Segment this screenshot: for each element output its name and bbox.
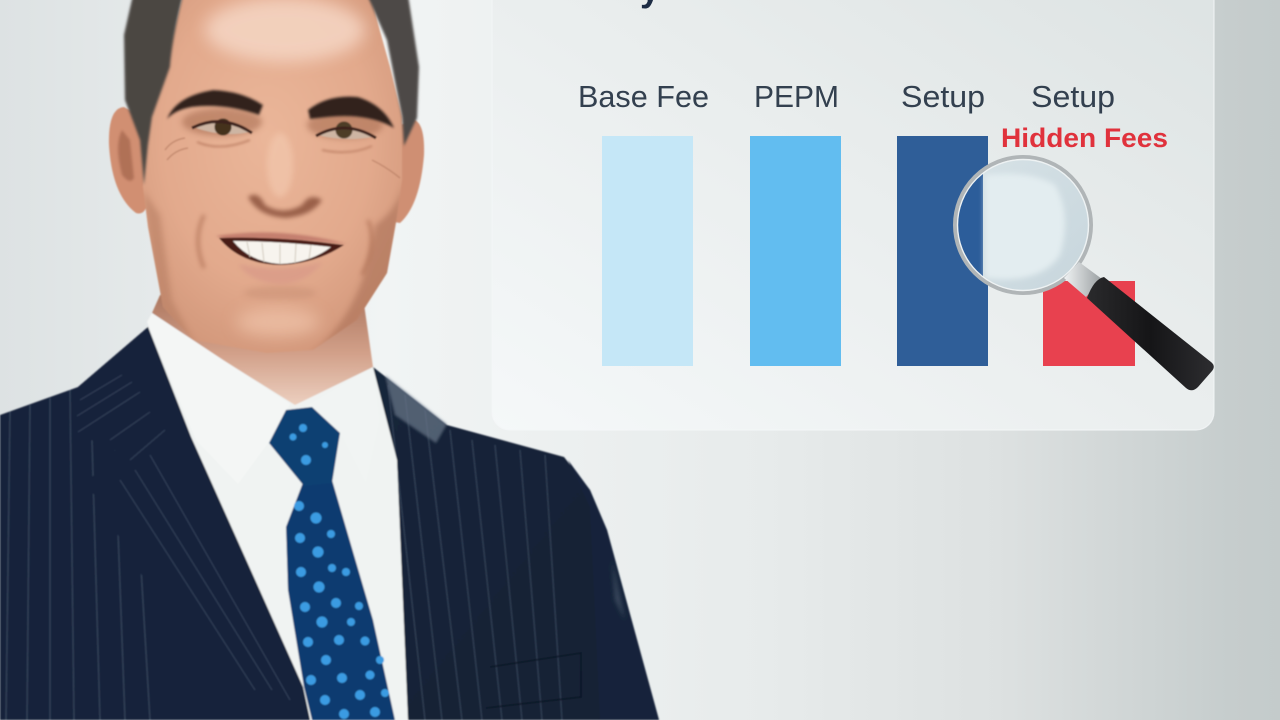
face shading [143,0,404,355]
panel: fee bar chart card [492,0,1214,430]
hair right [367,0,419,146]
left pinstripes [6,390,150,720]
jacket right [373,367,659,720]
breast pocket [486,653,581,708]
under eye crease right [322,146,372,152]
smile lines [198,215,372,275]
eye right shape [317,129,373,139]
tie [269,407,395,720]
jaw shadow right [323,195,400,342]
eye right [316,122,376,152]
label: Setup 2: Setup [1031,79,1115,114]
under lip shadow [248,287,312,298]
tie dots [290,424,389,719]
right pinstripes [388,385,562,720]
bar: PEPM [750,136,841,366]
tie knot [269,407,340,486]
upper lid left [192,122,252,133]
sleeve [568,460,659,720]
left lapel [74,327,310,720]
iris right [336,122,352,138]
lapel stripes [77,375,290,700]
upper lip [216,232,347,244]
hair left [124,0,183,185]
icon: magnifying glass [950,150,1214,390]
under eye crease left [197,140,250,147]
nose shadow [248,195,322,218]
label: Hidden Fees: Hidden Fees [1001,123,1168,153]
jaw shadow left [145,196,190,334]
lens [981,160,1088,290]
eye socket shadow right [307,111,383,139]
iris left [214,118,232,136]
lens rim [955,157,1091,293]
label: PEPM: PEPM [754,79,839,114]
bar: hidden fees [1043,281,1135,366]
teeth [233,241,331,264]
right collar wing [304,367,380,484]
shirt [147,327,408,720]
nose highlight [267,133,293,197]
jacket left body [0,327,310,720]
black handle [1087,277,1214,390]
ear right [394,120,424,223]
ear left [109,107,148,213]
lens rim highlight [958,160,1088,290]
person: businessman portrait [0,0,659,720]
jacket left [0,327,310,720]
crow's feet wrinkles [165,138,400,178]
ear left inner [118,130,134,181]
mouth [219,238,344,265]
tie blade [286,480,395,720]
right lapel sheen [385,375,447,443]
eye socket shadow left [182,108,262,136]
forehead highlight [205,0,365,62]
label: Setup 1: Setup [901,79,985,114]
face [142,0,402,353]
eye left [192,118,252,147]
bar: setup [897,136,988,366]
neck [152,290,373,405]
upper lid right [316,128,376,138]
eye left shape [193,122,250,134]
eyebrow right [308,97,394,128]
eyebrow left [167,90,263,119]
lower lip [238,262,323,284]
left collar wing [147,313,290,484]
label: Base Fee: Base Fee [578,79,709,114]
jacket right body [373,367,659,720]
metal collar [1064,262,1102,297]
sleeve sheen [612,560,625,620]
chin highlight [236,308,320,336]
shirt collar [147,313,380,484]
bar: base fee [602,136,693,366]
tooth separators [247,242,311,264]
